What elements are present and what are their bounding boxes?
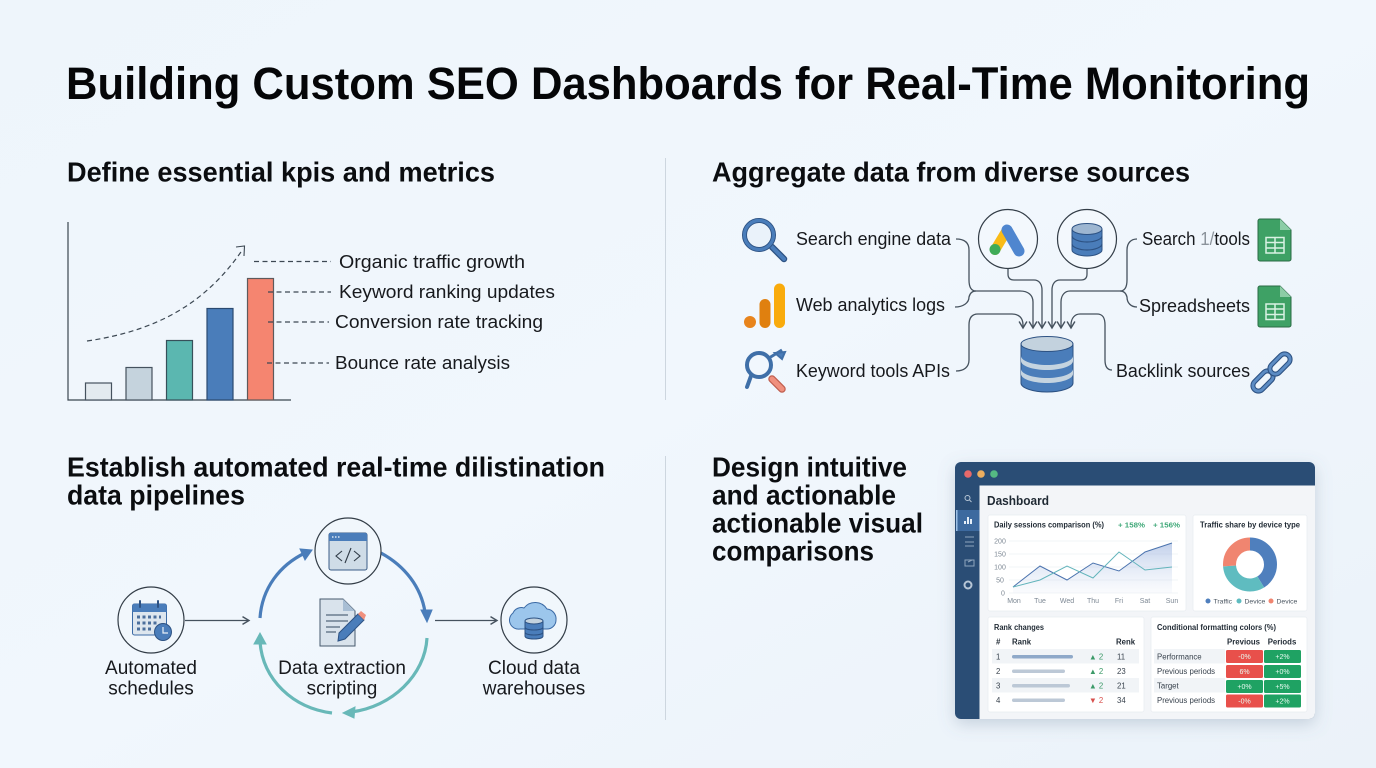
heading: define KPIs: Define essential kpis and metrics — [67, 156, 495, 188]
card: rank changes table: ▼ 2 — [1089, 696, 1103, 705]
card: conditional formatting table: Previous — [1227, 638, 1261, 646]
label: search tools: Search 1/tools — [1142, 228, 1250, 249]
card: daily sessions chart: 0 — [1001, 590, 1005, 598]
card: daily sessions chart: Tue — [1034, 598, 1046, 605]
card: rank changes table: 2 — [996, 667, 1000, 676]
card: daily sessions chart: Sat — [1140, 598, 1150, 605]
card: daily sessions chart: 150 — [994, 552, 1006, 558]
card: conditional formatting table: -0% — [1238, 654, 1251, 661]
icon: database circle — [1058, 210, 1116, 268]
card: rank changes table: ▲ 2 — [1089, 682, 1103, 690]
icon: magnifier — [744, 220, 784, 259]
card: conditional formatting table: Conditional formatting colors (%) — [1157, 623, 1276, 632]
card: conditional formatting table: +0% — [1237, 684, 1252, 691]
heading: aggregate data: Aggregate data from diverse sources — [712, 156, 1190, 188]
bar chart — [68, 222, 291, 400]
panel: visual comparisons — [712, 452, 1315, 719]
card: conditional formatting table: +2% — [1275, 654, 1290, 661]
window frame — [955, 462, 1315, 719]
icon: calendar circle — [118, 587, 184, 653]
card: rank changes table: 11 — [1117, 652, 1125, 662]
icon: document and pencil — [320, 599, 366, 646]
metric labels — [254, 251, 555, 373]
card: conditional formatting table: Target — [1157, 682, 1180, 690]
metric labels: Organic traffic growth — [339, 251, 525, 272]
card: conditional formatting table: +5% — [1275, 684, 1290, 691]
label: search engine data: Search engine data — [796, 228, 952, 249]
card: conditional formatting table: Previous periods — [1157, 667, 1215, 676]
card: rank changes table: 21 — [1117, 682, 1126, 690]
icon: cloud database circle — [501, 587, 567, 653]
card: rank changes table: 23 — [1117, 667, 1126, 676]
panel: define KPIs — [67, 156, 555, 400]
card: rank changes table: Rank changes — [994, 623, 1045, 632]
cycle arrows — [254, 549, 432, 718]
icon: ads logo circle — [978, 210, 1038, 268]
card: conditional formatting table: Previous periods — [1157, 696, 1215, 705]
icon: chain link — [1251, 352, 1292, 393]
card: rank changes table: Rank — [1012, 638, 1032, 646]
dashboard mockup — [955, 462, 1315, 719]
icon: code window circle — [315, 518, 381, 584]
card: daily sessions chart: Wed — [1060, 598, 1074, 605]
panel: aggregate data — [712, 156, 1292, 393]
card: rank changes table: 1 — [996, 652, 1000, 662]
label: automated schedules — [105, 658, 197, 700]
card: conditional formatting table: +2% — [1275, 698, 1290, 706]
card: rank changes table: ▲ 2 — [1089, 667, 1103, 676]
label: data extraction scripting — [278, 658, 406, 700]
icon: sheet one — [1258, 219, 1291, 261]
card: conditional formatting table: 6% — [1239, 669, 1250, 676]
card: daily sessions chart: Daily sessions comparison (%) — [994, 520, 1104, 530]
sidebar icons — [956, 496, 980, 588]
card: daily sessions chart: Fri — [1115, 598, 1124, 605]
metric labels: Keyword ranking updates — [339, 281, 555, 302]
card: daily sessions chart: 50 — [996, 578, 1004, 584]
card: rank changes table: 3 — [996, 682, 1000, 690]
heading: visual comparisons: and actionable — [712, 480, 896, 510]
icon: analytics bars — [744, 284, 785, 328]
icon: sheet two — [1258, 286, 1291, 327]
heading: visual comparisons: actionable visual — [712, 508, 923, 538]
card: rank changes table: Renk — [1116, 638, 1136, 646]
label: spreadsheets: Spreadsheets — [1139, 295, 1250, 316]
label: automated schedules: Automated — [105, 658, 197, 679]
card: traffic share donut: Traffic — [1214, 598, 1233, 606]
card: conditional formatting table: Performance — [1157, 652, 1202, 662]
card: traffic share donut — [1193, 515, 1307, 611]
card: traffic share donut: Device — [1276, 598, 1297, 606]
metric labels: Conversion rate tracking — [335, 311, 543, 332]
card: traffic share donut: Traffic share by device type — [1200, 520, 1301, 530]
arrow: loop to warehouse — [435, 620, 497, 622]
icon: central database — [1021, 336, 1073, 392]
label: data extraction scripting: Data extraction — [278, 658, 406, 679]
heading: visual comparisons — [712, 452, 923, 566]
metric labels: Bounce rate analysis — [335, 352, 510, 373]
heading: visual comparisons: comparisons — [712, 536, 874, 566]
card: traffic share donut: Device — [1244, 598, 1265, 606]
label: backlink sources: Backlink sources — [1116, 360, 1250, 381]
heading: visual comparisons: Design intuitive — [712, 452, 907, 482]
label: automated schedules: schedules — [108, 678, 194, 700]
heading: pipelines — [67, 452, 605, 510]
label: data extraction scripting: scripting — [307, 678, 377, 700]
card: rank changes table: 4 — [996, 696, 1001, 705]
card: rank changes table: ▲ 2 — [1089, 652, 1103, 662]
panel: pipelines — [67, 452, 605, 718]
heading: pipelines: Establish automated real-time dilistination — [67, 452, 605, 482]
card: daily sessions chart: Thu — [1087, 598, 1099, 605]
card: rank changes table — [988, 617, 1144, 712]
title: Building Custom SEO Dashboards for Real-Time Monitoring — [66, 58, 1310, 109]
card: daily sessions chart — [988, 515, 1186, 611]
card: rank changes table: 34 — [1117, 696, 1126, 705]
card: daily sessions chart: Mon — [1007, 598, 1021, 605]
label: cloud data warehouses: Cloud data — [488, 658, 580, 679]
card: rank changes table: # — [996, 638, 1001, 646]
card: conditional formatting table — [1151, 617, 1307, 712]
card: daily sessions chart: 100 — [994, 564, 1006, 572]
arrow: schedules to loop — [185, 620, 249, 622]
card: conditional formatting table: -0% — [1238, 698, 1251, 706]
icon: keyword tool — [747, 350, 785, 389]
card: daily sessions chart: 200 — [994, 538, 1006, 546]
card: daily sessions chart: + 156% — [1153, 520, 1180, 530]
heading: pipelines: data pipelines — [67, 480, 245, 510]
label: cloud data warehouses: warehouses — [482, 678, 585, 700]
card: daily sessions chart: Sun — [1166, 598, 1178, 605]
label: web analytics logs: Web analytics logs — [796, 294, 945, 315]
trend arrow — [87, 246, 244, 341]
connector lines — [955, 239, 1137, 371]
dashboard heading: Dashboard — [987, 493, 1049, 508]
card: conditional formatting table: +0% — [1275, 669, 1290, 676]
label: cloud data warehouses — [482, 658, 585, 700]
card: conditional formatting table: Periods — [1268, 638, 1297, 646]
card: daily sessions chart: + 158% — [1118, 520, 1145, 530]
label: keyword tools APIs: Keyword tools APIs — [796, 360, 950, 381]
